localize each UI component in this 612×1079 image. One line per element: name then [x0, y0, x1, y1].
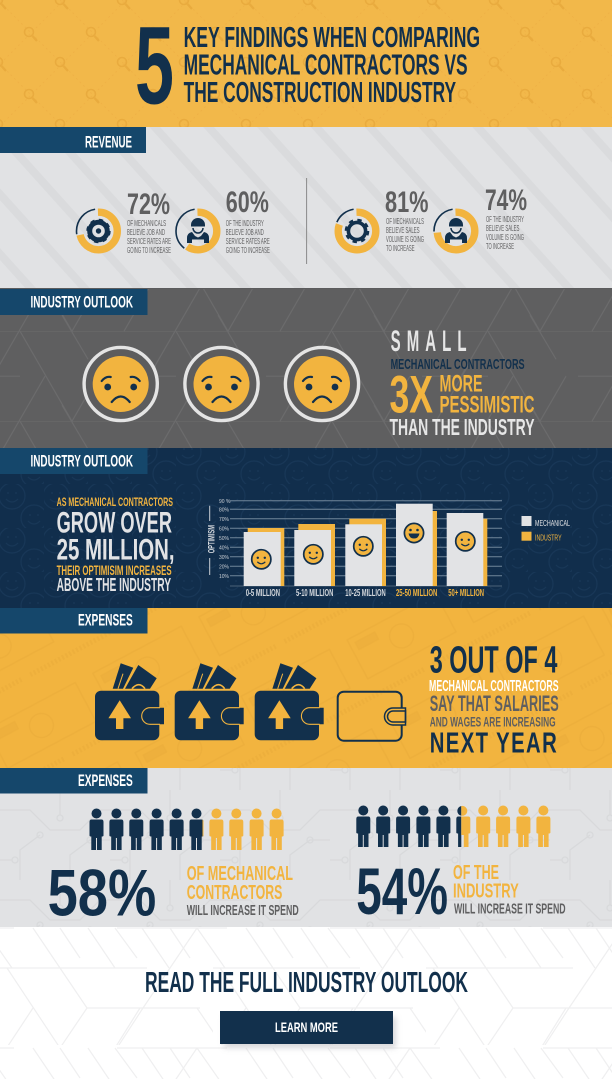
industry outlook tab [0, 289, 148, 315]
chart legend: INDUSTRY [535, 534, 562, 543]
panel: call to action [0, 927, 612, 1079]
pessimism text: SMALL [391, 326, 467, 359]
revenue tab [0, 127, 146, 153]
icon: three filled wallets [95, 663, 324, 740]
stat: 54%: 54% [356, 854, 448, 928]
bar chart: 25-50 MILLION [396, 588, 437, 599]
stat: 72% mechanicals: 72% [127, 188, 170, 221]
stat: 60% industry: BELIEVE JOB AND [226, 227, 264, 237]
stat: 72% mechanicals: OF MECHANICALS [127, 218, 166, 228]
bar chart: OPTIMISM [206, 525, 216, 553]
stat: 81% mechanicals: VOLUME IS GOING [386, 234, 424, 244]
button: learn more: LEARN MORE [275, 1019, 338, 1035]
bar chart: 70% [219, 517, 230, 523]
expenses tab [0, 768, 148, 794]
icon: three sad faces [84, 347, 359, 421]
stat: 58%: 58% [48, 856, 156, 930]
stat: 81% mechanicals [335, 186, 428, 253]
chart legend [522, 516, 570, 543]
bar chart: 80% [219, 508, 230, 514]
stat: 74% industry: TO INCREASE [486, 241, 514, 251]
pessimism text: PESSIMISTIC [440, 392, 535, 419]
growth text [57, 495, 175, 595]
expenses tab: EXPENSES [78, 611, 133, 630]
growth text: AS MECHANICAL CONTRACTORS [57, 495, 173, 509]
salaries text: NEXT YEAR [430, 727, 557, 760]
stat: 74% industry: OF THE INDUSTRY [486, 214, 524, 224]
bar chart: 60% [219, 526, 230, 532]
people icons: 54 percent [356, 806, 550, 847]
mechanical IT spend text: CONTRACTORS [187, 882, 282, 904]
bar chart: 20% [219, 564, 230, 570]
stat: 72% mechanicals: BELIEVE JOB AND [127, 227, 165, 237]
bar chart: 30% [219, 555, 230, 561]
industry IT spend text [453, 862, 566, 917]
pessimism text: 3X [390, 365, 433, 424]
panel: revenue [0, 127, 612, 290]
expenses tab: EXPENSES [78, 771, 133, 790]
growth text: 25 MILLION, [57, 533, 175, 566]
stat: 81% mechanicals: BELIEVE SALES [386, 225, 420, 235]
bar chart: 50% [219, 536, 230, 542]
stat: 72% mechanicals: GOING TO INCREASE [127, 245, 171, 255]
growth text: GROW OVER [57, 506, 172, 539]
people icons: 58 percent [90, 808, 284, 850]
panel: expenses IT spend [0, 768, 612, 930]
bar chart [206, 499, 502, 599]
industry IT spend text: OF THE [453, 862, 499, 884]
expenses tab [0, 608, 148, 634]
industry outlook tab: INDUSTRY OUTLOOK [30, 452, 133, 471]
stat: 81% mechanicals: OF MECHANICALS [386, 216, 424, 226]
stat: 81% mechanicals: 81% [385, 186, 428, 219]
panel: industry outlook optimism [0, 448, 612, 608]
bar chart: 10% [219, 574, 230, 580]
pessimism text [390, 326, 535, 440]
pessimism text: MECHANICAL CONTRACTORS [391, 356, 525, 373]
chart legend: MECHANICAL [535, 519, 570, 528]
pessimism text: MORE [440, 371, 482, 398]
stat: 81% mechanicals: TO INCREASE [386, 243, 415, 253]
industry outlook tab [0, 448, 148, 474]
stat: 74% industry: VOLUME IS GOING [486, 232, 524, 242]
bar chart: 10-25 MILLION [345, 588, 386, 599]
mechanical IT spend text: WILL INCREASE IT SPEND [187, 902, 299, 919]
stat: 74% industry: BELIEVE SALES [486, 223, 520, 233]
bar chart: 0-5 MILLION [246, 588, 280, 599]
icon: empty wallet [338, 692, 406, 741]
stat: 60% industry: 60% [226, 186, 269, 219]
header band [0, 0, 612, 128]
panel: expenses salaries [0, 608, 612, 768]
stat: 60% industry: OF THE INDUSTRY [226, 218, 264, 228]
bar chart: 40% [219, 546, 230, 552]
stat: 74% industry: 74% [485, 184, 527, 217]
growth text: THEIR OPTIMISIM INCREASES [57, 563, 172, 578]
stat: 72% mechanicals [76, 188, 171, 255]
title [184, 22, 480, 109]
industry IT spend text: INDUSTRY [453, 880, 519, 902]
bar chart: 50+ MILLION [448, 588, 484, 599]
stat: 60% industry: SERVICE RATES ARE [226, 236, 270, 246]
salaries text [429, 639, 559, 760]
stat: 60% industry: GOING TO INCREASE [226, 245, 270, 255]
stat: 60% industry [176, 186, 270, 255]
bar chart: 5-10 MILLION [296, 588, 333, 599]
revenue tab: REVENUE [85, 132, 132, 151]
panel: industry outlook pessimism [0, 289, 612, 448]
mechanical IT spend text: OF MECHANICAL [187, 863, 293, 885]
mechanical IT spend text [187, 863, 299, 919]
industry outlook tab: INDUSTRY OUTLOOK [30, 292, 133, 311]
growth text: ABOVE THE INDUSTRY [57, 575, 171, 595]
bar chart: 90 % [219, 499, 231, 505]
big number 5: 5 [135, 4, 174, 128]
stat: 74% industry [434, 184, 527, 253]
stat: 72% mechanicals: SERVICE RATES ARE [127, 236, 171, 246]
button: learn more [220, 1011, 396, 1048]
